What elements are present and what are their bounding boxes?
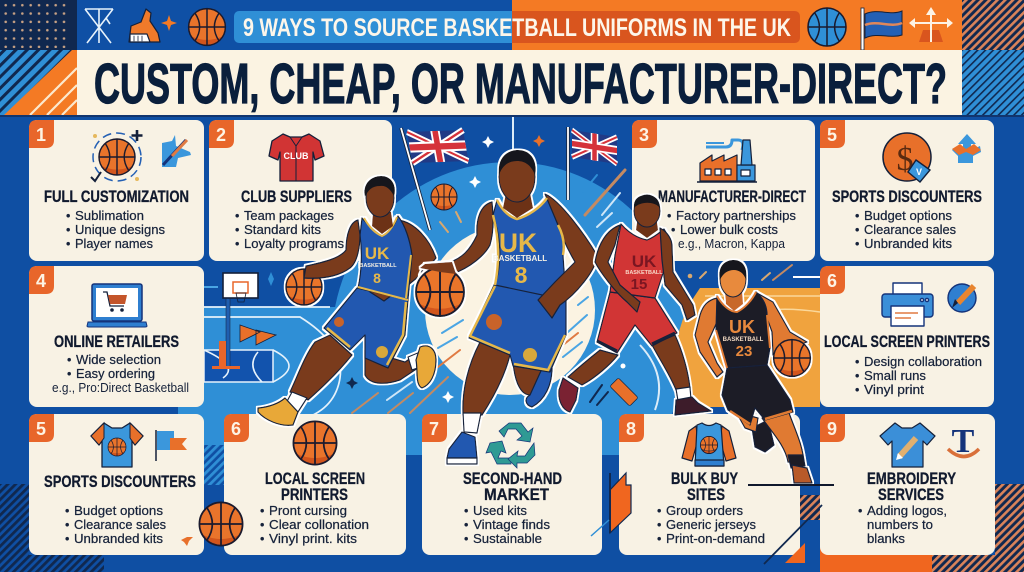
list: • xyxy=(235,209,239,223)
list: • xyxy=(855,209,859,223)
header icon: basketball xyxy=(189,9,225,45)
panel: 6 local screen printers (bottom) xyxy=(224,414,406,555)
icon: pennant flag xyxy=(156,430,187,461)
badge: 5: 5 xyxy=(827,125,837,145)
icon: pencil badge xyxy=(948,284,976,312)
list: Design collaboration xyxy=(864,355,982,369)
jersey text: UK xyxy=(499,228,537,258)
panel: 6 local screen printers (right) xyxy=(820,266,994,407)
badge: 5 xyxy=(820,120,845,148)
list: Vinyl print. kits xyxy=(269,532,357,546)
jersey text: BASKETBALL xyxy=(359,263,397,269)
background: center court xyxy=(178,117,820,572)
list xyxy=(235,209,344,251)
list: Easy ordering xyxy=(76,367,155,381)
header icon: white arrows xyxy=(909,7,953,42)
icon: arrow shirts xyxy=(952,134,981,163)
corner: blue stripes right xyxy=(962,50,1024,115)
jersey text: UK xyxy=(632,252,657,271)
list: • xyxy=(260,518,264,532)
header icon: sneaker xyxy=(129,9,160,42)
jersey text: 23 xyxy=(736,343,752,360)
list: • xyxy=(464,518,468,532)
list: • xyxy=(855,383,859,397)
floor line xyxy=(748,484,834,486)
badge: 8 xyxy=(619,414,644,442)
jersey text: BASKETBALL xyxy=(625,270,663,276)
icon: red club jersey xyxy=(269,134,324,181)
heading: SPORTS DISCOUNTERS xyxy=(44,472,196,491)
legs xyxy=(559,335,711,415)
badge: 8: 8 xyxy=(626,419,636,439)
panel: 9 embroidery services xyxy=(820,414,995,555)
badge: 7 xyxy=(422,414,447,442)
icon: pencil on shape xyxy=(162,135,191,167)
heading: FULL CUSTOMIZATION xyxy=(44,187,189,206)
list: Sublimation xyxy=(75,209,144,223)
heading: LOCAL SCREEN xyxy=(265,469,365,488)
heading xyxy=(265,469,365,504)
list: Small runs xyxy=(864,369,926,383)
list: Vinyl print xyxy=(864,383,925,397)
list: Budget options xyxy=(864,209,952,223)
head xyxy=(634,195,660,238)
list: • xyxy=(657,532,661,546)
list: • xyxy=(260,504,264,518)
list: Group orders xyxy=(666,504,743,518)
list xyxy=(855,355,982,397)
heading: PRINTERS xyxy=(281,485,348,504)
jersey and arms xyxy=(595,224,695,320)
heading: ONLINE RETAILERS xyxy=(54,332,179,351)
list: numbers to xyxy=(867,518,933,532)
list: • xyxy=(855,223,859,237)
UK flag right xyxy=(568,127,617,200)
list: • xyxy=(67,353,71,367)
heading: MARKET xyxy=(484,485,550,504)
icon: orange spark xyxy=(181,537,193,546)
badge: 9: 9 xyxy=(827,419,837,439)
heading: BULK BUY xyxy=(671,469,738,488)
corner: tan stripes top right xyxy=(962,0,1024,50)
list xyxy=(855,209,956,251)
jersey text xyxy=(723,317,764,360)
list xyxy=(464,504,550,546)
list: • xyxy=(464,504,468,518)
list: • xyxy=(65,504,69,518)
shorts xyxy=(722,365,793,425)
list: • xyxy=(667,209,671,223)
icon: basketball xyxy=(293,421,337,465)
list: • xyxy=(855,369,859,383)
jersey text: BASKETBALL xyxy=(493,254,547,263)
list: • xyxy=(66,237,70,251)
jersey text xyxy=(493,228,547,288)
small basketball by flag xyxy=(431,184,457,210)
list: • xyxy=(66,209,70,223)
subtitle pill: blue xyxy=(234,11,524,43)
icon: factory xyxy=(697,140,757,182)
heading: SECOND-HAND xyxy=(463,469,562,488)
heading xyxy=(867,469,957,504)
badge: 4: 4 xyxy=(36,271,46,291)
jersey text xyxy=(359,244,397,286)
list: Print-on-demand xyxy=(666,532,765,546)
list: Wide selection xyxy=(76,353,161,367)
list: Lower bulk costs xyxy=(680,223,778,237)
heading: SITES xyxy=(687,485,725,504)
list: • xyxy=(858,504,862,518)
badge: 6: 6 xyxy=(827,271,837,291)
list: • xyxy=(657,518,661,532)
panel: 2 club suppliers xyxy=(209,120,392,261)
list: Player names xyxy=(75,237,153,251)
list: Clearance sales xyxy=(864,223,956,237)
list: Used kits xyxy=(473,504,527,518)
list: • xyxy=(65,518,69,532)
diagonal accents over panel 8 xyxy=(764,505,822,564)
corner: diagonal stripes left xyxy=(0,50,77,115)
badge: 6: 6 xyxy=(231,419,241,439)
legs xyxy=(447,342,552,464)
list xyxy=(657,504,765,546)
heading: EMBROIDERY xyxy=(867,469,957,488)
icon: price coin and tag: $ xyxy=(896,141,914,178)
basketball xyxy=(286,269,322,305)
list: Clear collonation xyxy=(269,518,369,532)
UK flag left xyxy=(401,128,468,230)
panel: 8 bulk buy sites xyxy=(619,414,800,555)
icon: sweatshirt xyxy=(682,423,736,466)
badge: 7: 7 xyxy=(429,419,439,439)
panel: 1 full customization xyxy=(29,120,204,261)
badge: 6 xyxy=(224,414,249,442)
player: black number 23 xyxy=(695,260,812,483)
list xyxy=(66,209,165,251)
badge: 1: 1 xyxy=(36,125,46,145)
badge: 5: 5 xyxy=(36,419,46,439)
jersey text: 8 xyxy=(515,262,528,288)
panel: 5 sports discounters (bottom) xyxy=(29,414,204,555)
list: Generic jerseys xyxy=(666,518,756,532)
header icon: blue basketball xyxy=(808,8,846,46)
list: Standard kits xyxy=(244,223,321,237)
shorts xyxy=(469,283,566,372)
list xyxy=(52,353,189,395)
jersey text: 8 xyxy=(373,270,381,286)
basketball: centre player's dribble xyxy=(416,262,464,316)
basketball between panels xyxy=(199,502,243,546)
heading: CLUB SUPPLIERS xyxy=(241,187,352,206)
player: blue number 8 left xyxy=(258,176,436,425)
icon: red club jersey: CLUB xyxy=(284,151,309,161)
list xyxy=(667,209,796,251)
badge: 1 xyxy=(29,120,54,148)
list: blanks xyxy=(867,532,905,546)
player: red number 15 xyxy=(559,195,711,415)
list: Unbranded kits xyxy=(864,237,952,251)
heading: SERVICES xyxy=(878,485,944,504)
badge: 2 xyxy=(209,120,234,148)
corner: dot pattern xyxy=(0,0,77,50)
badge: 5 xyxy=(29,414,54,442)
legs xyxy=(736,410,812,483)
list: Sustainable xyxy=(473,532,542,546)
panel: 4 online retailers xyxy=(29,266,204,407)
list: • xyxy=(67,367,71,381)
icon: customised basketball xyxy=(91,130,142,181)
header icon: star xyxy=(161,15,177,31)
list: Unbranded kits xyxy=(74,532,163,546)
list: Vintage finds xyxy=(473,518,550,532)
jersey and arms xyxy=(304,216,436,301)
badge: 6 xyxy=(820,266,845,294)
list xyxy=(65,504,166,546)
list: Budget options xyxy=(74,504,163,518)
list: • xyxy=(855,355,859,369)
list: • xyxy=(464,532,468,546)
jersey text xyxy=(625,252,663,293)
jersey text: 15 xyxy=(631,276,647,293)
head xyxy=(499,150,536,218)
header band: blue half xyxy=(77,0,512,50)
jersey text: UK xyxy=(729,317,755,337)
list: • xyxy=(235,237,239,251)
header icon: flag xyxy=(861,8,902,50)
panel: 5 sports discounters (right) xyxy=(820,120,994,261)
icon: price coin and tag: V xyxy=(916,167,922,177)
list: e.g., Macron, Kappa xyxy=(678,237,785,251)
list: • xyxy=(855,237,859,251)
list: Pront cursing xyxy=(269,504,347,518)
icon: recycle arrows xyxy=(486,423,535,468)
list: Unique designs xyxy=(75,223,165,237)
heading xyxy=(671,469,738,504)
list: • xyxy=(260,532,264,546)
title band xyxy=(77,50,962,115)
list: • xyxy=(671,223,675,237)
list: e.g., Pro:Direct Basketball xyxy=(52,381,189,395)
jersey text: UK xyxy=(365,244,390,263)
basketball hoop and court markings xyxy=(204,272,340,420)
list: Adding logos, xyxy=(867,504,947,518)
shorts xyxy=(324,288,408,368)
badge: 3: 3 xyxy=(639,125,649,145)
jersey and arms xyxy=(420,194,597,318)
list: Loyalty programs xyxy=(244,237,344,251)
icon: blue tee with ball xyxy=(91,423,143,467)
list xyxy=(260,504,369,546)
badge: 2: 2 xyxy=(216,125,226,145)
list: • xyxy=(235,223,239,237)
header band: orange half xyxy=(512,0,962,50)
decorative stripe patches xyxy=(0,445,1024,572)
pennant decoration xyxy=(591,473,631,536)
heading: MANUFACTURER-DIRECT xyxy=(658,187,806,206)
list: Factory partnerships xyxy=(676,209,796,223)
badge: 3 xyxy=(632,120,657,148)
list: Clearance sales xyxy=(74,518,166,532)
subtitle: 9 WAYS TO SOURCE BASKETBALL UNIFORMS IN THE UK xyxy=(243,14,791,42)
head xyxy=(719,260,746,311)
icon: printer xyxy=(882,283,933,326)
list: • xyxy=(657,504,661,518)
list: • xyxy=(66,223,70,237)
head xyxy=(364,176,395,234)
basketball xyxy=(774,340,810,376)
player: blue number 8 centre xyxy=(420,150,597,464)
heading xyxy=(463,469,562,504)
list: • xyxy=(65,532,69,546)
jersey text: BASKETBALL xyxy=(723,337,764,343)
list: Team packages xyxy=(244,209,334,223)
motion streaks and stars xyxy=(346,135,820,413)
badge: 9 xyxy=(820,414,845,442)
list xyxy=(858,504,947,546)
arms and jersey xyxy=(695,292,807,377)
header icon: white cross figure xyxy=(85,9,113,43)
badge: 4 xyxy=(29,266,54,294)
shorts xyxy=(597,292,677,353)
icon: tee with pencil xyxy=(880,423,935,467)
panel: 3 manufacturer-direct xyxy=(632,120,815,261)
legs xyxy=(258,335,436,425)
icon: price coin and tag xyxy=(883,133,931,182)
icon: monogram T: T xyxy=(952,423,975,460)
icon: laptop with cart xyxy=(87,284,147,327)
panel: 7 second-hand market xyxy=(422,414,602,555)
subtitle pill: orange xyxy=(512,11,800,43)
